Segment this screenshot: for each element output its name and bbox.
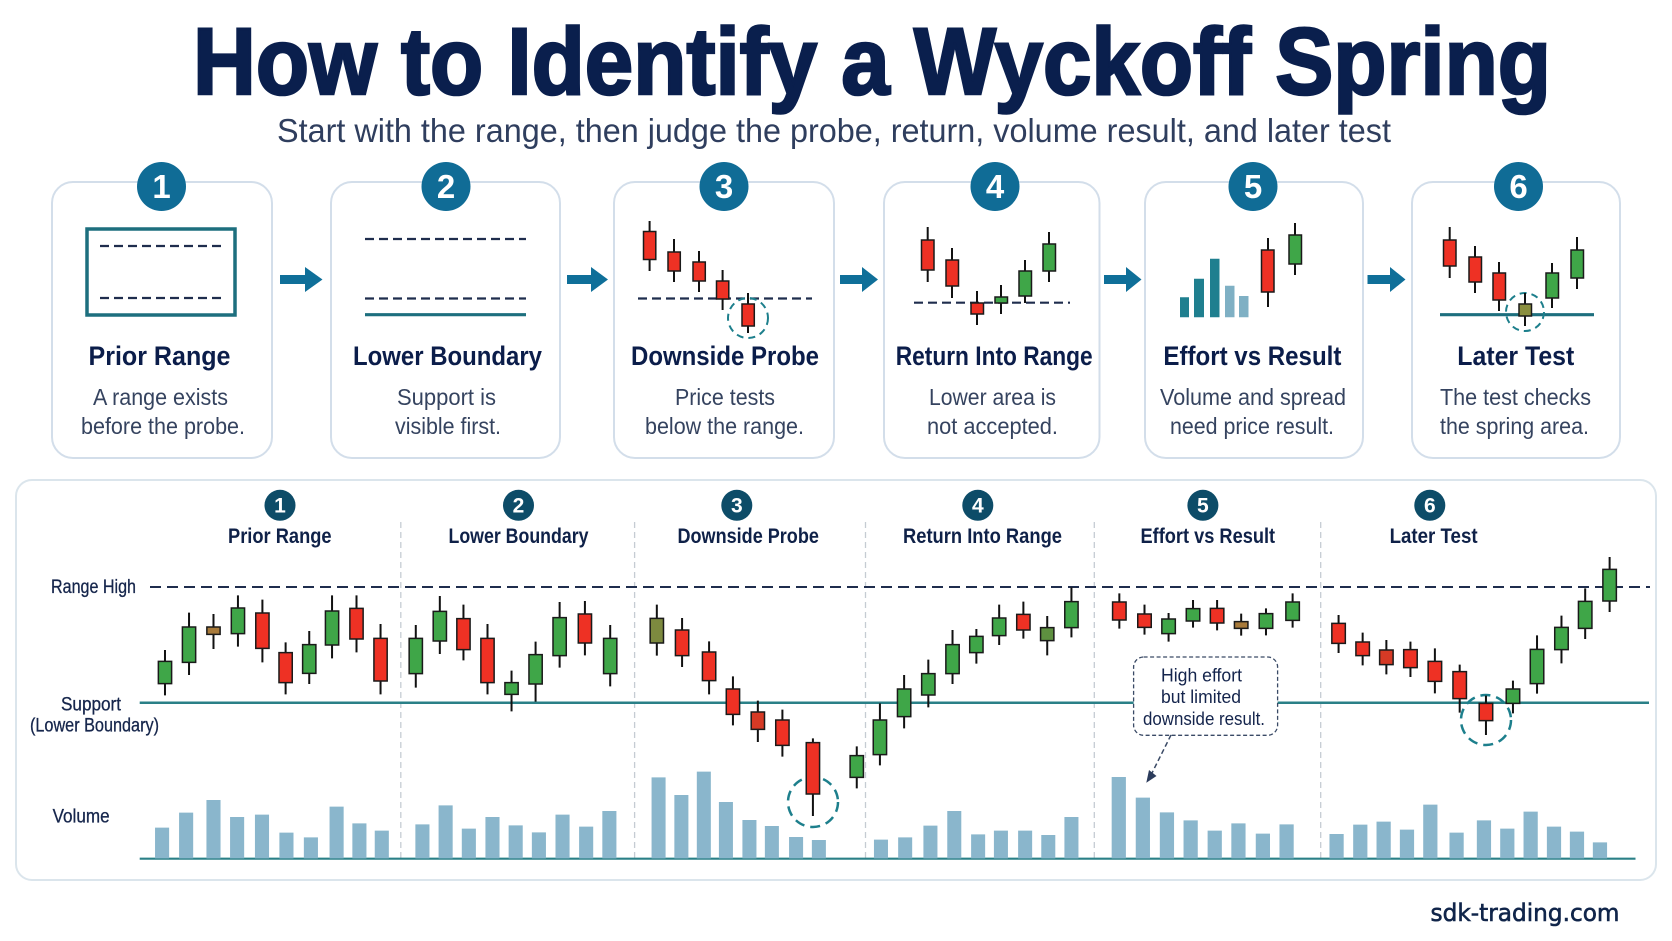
arrow 4 xyxy=(1104,267,1142,292)
phase header 6: Later Test xyxy=(1390,525,1478,548)
range high line xyxy=(150,586,1650,588)
badge 3 xyxy=(700,162,748,211)
phase header 4 xyxy=(903,490,1062,548)
support line xyxy=(140,701,1649,704)
phase separators xyxy=(401,522,1321,858)
phase header 1: 1 xyxy=(274,494,286,518)
panel: annotated price chart xyxy=(16,480,1656,880)
phase header 2: 2 xyxy=(513,494,524,518)
badge 2 xyxy=(422,162,470,211)
badge 6: 6 xyxy=(1509,168,1528,205)
phase header 5: 5 xyxy=(1197,494,1209,518)
icon: later test candles xyxy=(1440,227,1594,331)
badge 4 xyxy=(970,162,1020,211)
volume label: Volume xyxy=(53,807,110,828)
heading: return into range: Return Into Range xyxy=(896,341,1093,371)
phase header 4: Return Into Range xyxy=(903,525,1062,548)
title: How to Identify a Wyckoff Spring xyxy=(193,9,1551,115)
description 6: The test checks xyxy=(1440,384,1591,410)
arrow 2 xyxy=(567,267,608,292)
icon: volume bars and candles xyxy=(1180,223,1302,317)
heading: effort vs result: Effort vs Result xyxy=(1163,341,1341,371)
description 3: Price tests xyxy=(675,384,775,410)
panel: step 4 return into range xyxy=(884,162,1100,458)
heading: later test: Later Test xyxy=(1457,341,1574,371)
phase header 1: Prior Range xyxy=(228,525,332,548)
icon: probe candles xyxy=(638,221,812,338)
arrow: callout to volume xyxy=(1146,735,1171,783)
badge 3: 3 xyxy=(715,168,733,205)
icon: range box xyxy=(87,229,235,315)
badge 1: 1 xyxy=(152,168,171,205)
later test highlight circle xyxy=(1461,695,1511,745)
description 1: A range exists xyxy=(93,384,228,410)
heading: lower boundary: Lower Boundary xyxy=(353,341,542,371)
heading: prior range: Prior Range xyxy=(88,341,230,371)
volume axis xyxy=(140,858,1636,860)
candles: prior range and lower boundary xyxy=(158,595,617,711)
description 2: Support is xyxy=(397,384,496,410)
badge 4: 4 xyxy=(986,168,1005,205)
description 2: visible first. xyxy=(395,413,501,439)
phase header 5: Effort vs Result xyxy=(1140,525,1275,548)
icon: boundary lines xyxy=(365,239,526,315)
panel: step 3 downside probe xyxy=(614,162,834,458)
heading: downside probe: Downside Probe xyxy=(631,341,819,371)
panel: step 6 later test xyxy=(1412,162,1620,458)
callout: high effort: High effort xyxy=(1161,665,1242,686)
badge 1 xyxy=(137,162,186,211)
phase header 3: 3 xyxy=(731,494,743,518)
description 4: Lower area is xyxy=(929,384,1056,410)
description 5: need price result. xyxy=(1170,413,1334,439)
phase header 2: Lower Boundary xyxy=(448,525,589,548)
candles: effort vs result and later test xyxy=(1113,557,1616,735)
phase header 6 xyxy=(1390,490,1478,548)
phase header 3 xyxy=(678,490,819,548)
badge 2: 2 xyxy=(437,168,455,205)
arrow 3 xyxy=(840,267,878,292)
panel: step 5 effort vs result xyxy=(1145,162,1363,458)
description 1: before the probe. xyxy=(81,413,245,439)
panel: step 2 lower boundary xyxy=(331,162,560,458)
source url: sdk-trading.com xyxy=(1430,899,1620,927)
callout: high effort xyxy=(1134,657,1278,735)
phase header 1 xyxy=(228,490,332,548)
arrow 5 xyxy=(1368,267,1406,292)
subtitle: Start with the range, then judge the probe, return, volume result, and later test xyxy=(277,112,1391,149)
panel: step 1 prior range xyxy=(52,162,272,458)
description 5: Volume and spread xyxy=(1160,384,1346,410)
phase header 2 xyxy=(448,490,589,548)
support label: (Lower Boundary) xyxy=(30,716,159,736)
phase header 3: Downside Probe xyxy=(678,525,819,548)
description 4: not accepted. xyxy=(927,413,1058,439)
arrow 1 xyxy=(280,267,322,292)
callout: high effort: but limited xyxy=(1161,686,1241,707)
phase header 4: 4 xyxy=(972,494,984,518)
volume bars xyxy=(155,772,1607,858)
icon: return candles xyxy=(914,227,1070,325)
badge 5 xyxy=(1228,162,1278,211)
phase header 6: 6 xyxy=(1424,494,1436,518)
phase header 5 xyxy=(1140,490,1275,548)
spring highlight circle xyxy=(788,777,838,827)
description 3: below the range. xyxy=(645,413,804,439)
badge 6 xyxy=(1494,162,1543,211)
support label: Support xyxy=(61,695,122,716)
description 6: the spring area. xyxy=(1440,413,1589,439)
callout: high effort: downside result. xyxy=(1143,708,1265,729)
range high label: Range High xyxy=(51,577,136,598)
badge 5: 5 xyxy=(1244,168,1262,205)
candles: downside probe and return into range xyxy=(650,587,1078,816)
